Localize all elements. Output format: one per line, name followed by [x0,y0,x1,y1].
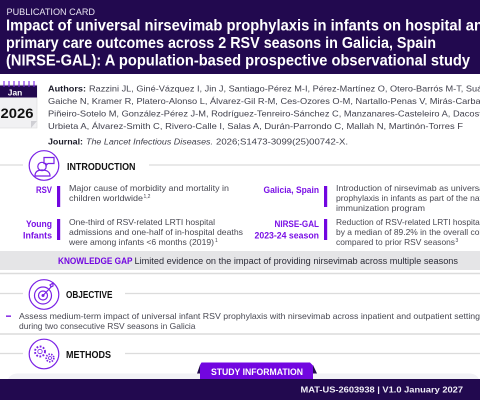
objective text: Assess medium-term impact of universal infant RSV prophylaxis with nirsevimab across inpatient and outpatient setting [19,311,480,321]
introduction: RSV [36,183,229,207]
knowledge gap band: Limited evidence on the impact of providing nirsevimab across multiple seasons [134,256,459,266]
footer: MAT-US-2603938 | V1.0 January 2027 [300,384,463,394]
title [6,18,480,70]
icon: calendar [0,81,37,128]
heading: objective: OBJECTIVE [66,290,113,301]
introduction: NIRSE-GAL 2023-24 season: compared to prior RSV seasons [336,237,455,247]
introduction: young infants: Young [26,219,52,229]
introduction: NIRSE-GAL 2023-24 season: NIRSE-GAL [274,219,319,229]
authors: Piñeiro-Sotelo M, González-Pérez J-M, Rodríguez-Tenreiro-Sánchez C, Manzanares-Casteleiro A, Dacosta- [48,108,480,118]
introduction: young infants: Infants [23,230,52,240]
authors: Razzini JL, Giné-Vázquez I, Jin J, Santiago-Pérez M-I, Pérez-Martínez O, Otero-Barrós M-T, Suárez- [89,84,480,94]
introduction: young infants [23,217,243,247]
icon: introduction person with speech bubble [29,151,59,180]
authors: Authors: [48,84,86,94]
introduction: young infants: admissions and one-half of in-hospital deaths [69,227,243,237]
introduction: Galicia, Spain: immunization program [336,203,425,213]
icon: objective target [29,280,59,309]
icon: methods gears [29,339,59,369]
introduction: NIRSE-GAL 2023-24 season: 2023-24 season [254,230,319,240]
journal: 2026;S1473-3099(25)00742-X. [216,136,348,146]
introduction: RSV: RSV [36,185,52,195]
study information ribbon: STUDY INFORMATION [211,367,303,378]
introduction: young infants: One-third of RSV-related LRTI hospital [69,217,215,227]
study information panel [7,374,480,400]
introduction: young infants: were among infants <6 months (2019) [68,237,214,247]
heading: methods: METHODS [66,350,111,361]
journal: Journal: [48,136,83,146]
knowledge gap band [0,251,480,270]
journal: The Lancet Infectious Diseases. [86,136,213,146]
knowledge gap band: KNOWLEDGE GAP [58,256,133,266]
publication card label: PUBLICATION CARD [6,7,95,17]
header banner [0,0,480,74]
objective text [6,311,480,331]
authors: Gaiche N, Kramer R, Platero-Alonso L, Álvarez-Gil R-M, Ces-Ozores O-M, Nartallo-Penas V, Mirás-Carballal [48,96,480,106]
authors: Urbieta A, Álvarez-Smith C, Rivero-Calle I, Salas A, Durán-Parrondo C, Mallah N, Martinón-Torres F [48,121,463,131]
introduction: RSV: Major cause of morbidity and mortality in [69,183,229,193]
authors [48,84,480,131]
introduction: NIRSE-GAL 2023-24 season [254,217,480,247]
study information ribbon [197,362,317,379]
introduction: Galicia, Spain: Introduction of nirsevimab as universal [336,183,480,193]
objective text: during two consecutive RSV seasons in Galicia [19,321,196,331]
journal [48,136,348,146]
introduction: NIRSE-GAL 2023-24 season: 3 [456,238,458,244]
icon: calendar: 2026 [0,105,34,121]
introduction: Galicia, Spain: Galicia, Spain [264,185,319,195]
footer [0,379,480,400]
introduction: RSV: 1,2 [144,194,151,200]
introduction: RSV: children worldwide [69,193,143,203]
heading: introduction: INTRODUCTION [67,162,136,173]
introduction: young infants: 1 [215,238,218,244]
introduction: Galicia, Spain [264,183,480,213]
icon: calendar: Jan [8,88,22,98]
title: primary care outcomes across 2 RSV seasons in Galicia, Spain [6,35,436,52]
